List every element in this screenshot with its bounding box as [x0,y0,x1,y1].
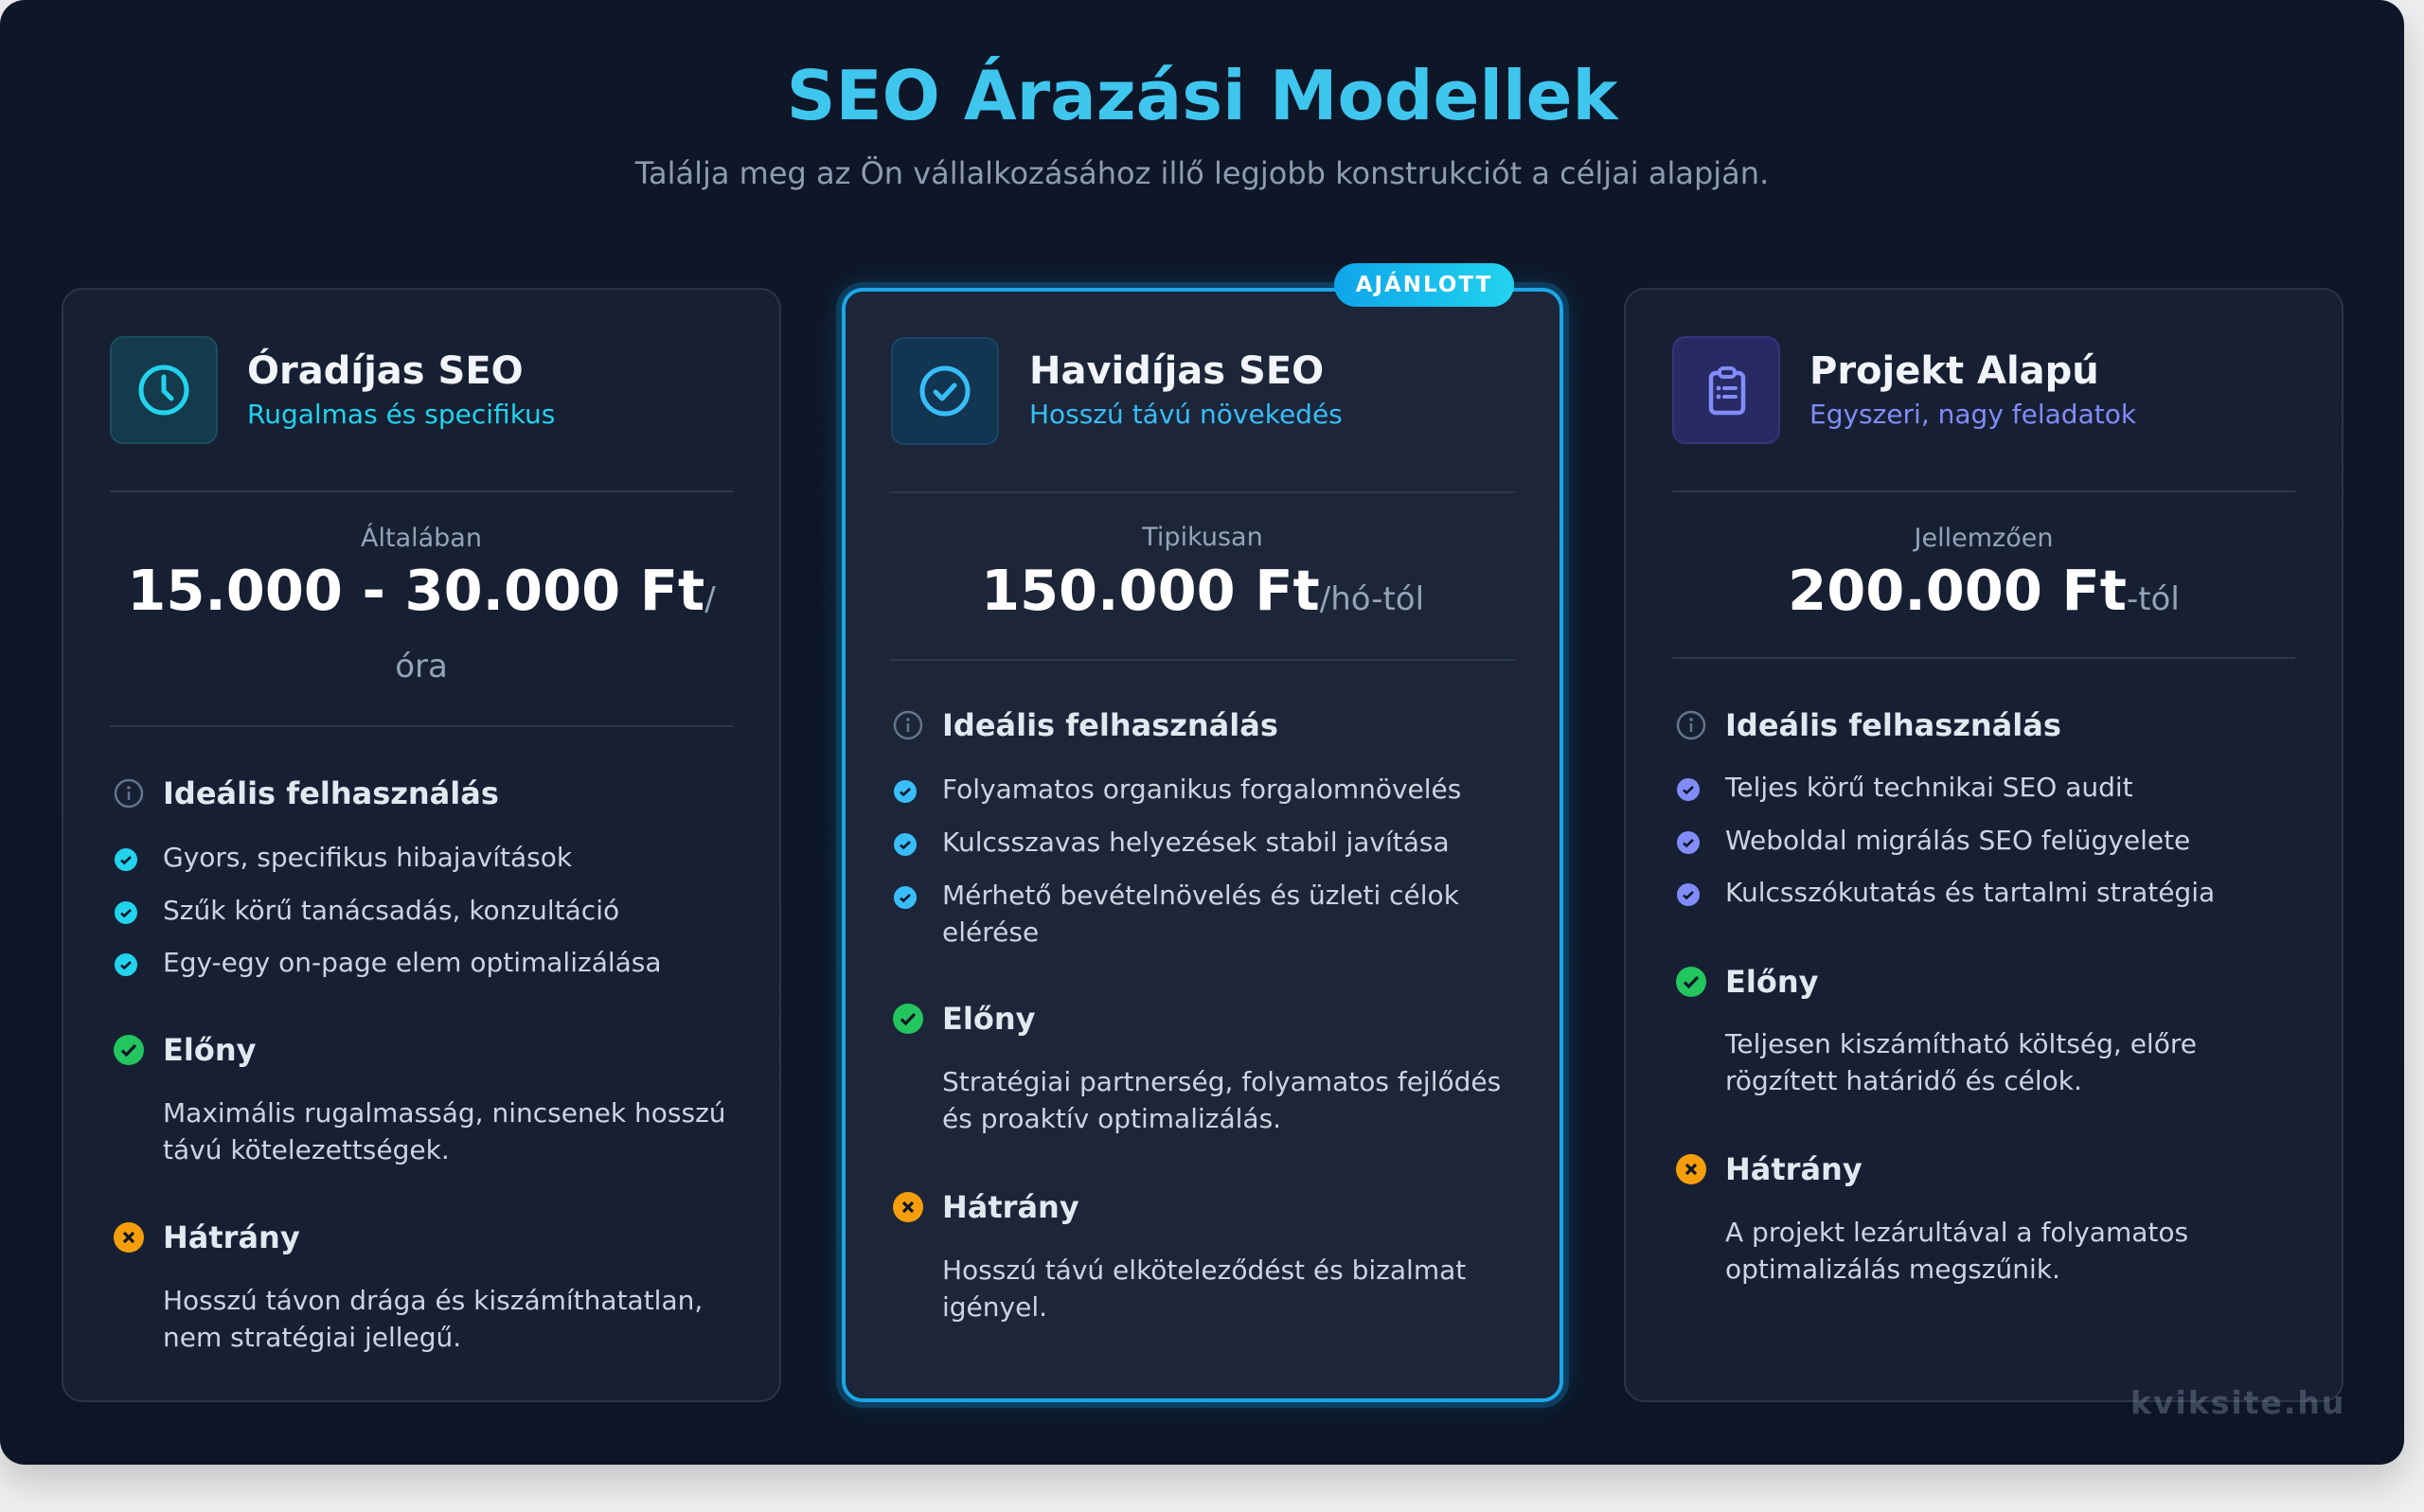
section: advantage: Előny [163,1032,256,1068]
section: disadvantage: Hosszú távon drága és kiszámíthatatlan, nem stratégiai jellegű. [163,1285,703,1353]
badge [1334,263,1514,307]
section: disadvantage [893,1189,1466,1323]
badge: AJÁNLOTT [1356,273,1492,297]
section: disadvantage: A projekt lezárultával a folyamatos optimalizálás megszűnik. [1725,1217,2188,1285]
section: ideal use [894,707,1461,948]
subtitle: Találja meg az Ön vállalkozásához illő legjobb konstrukciót a céljai alapján. [635,155,1769,191]
section: ideal use: Ideális felhasználás [942,707,1278,743]
icon: check circle [891,337,999,445]
section: disadvantage: Hátrány [163,1219,300,1255]
watermark: kviksite.hu [2130,1384,2345,1421]
price: 15.000 - 30.000 Ft/ [127,558,716,623]
card subtitle: Hosszú távú növekedés [1029,399,1343,430]
price label: Általában [361,524,482,553]
card subtitle: Egyszeri, nagy feladatok [1809,399,2136,430]
title: SEO Árazási Modellek [787,56,1617,135]
section: ideal use: Szűk körű tanácsadás, konzultáció [163,895,619,926]
section: disadvantage: Hátrány [942,1189,1079,1225]
section: ideal use: Teljes körű technikai SEO audit [1725,772,2133,803]
price label: Jellemzően [1915,524,2053,553]
section: ideal use: Kulcsszavas helyezések stabil javítása [942,827,1450,858]
section: advantage: Előny [942,1001,1035,1037]
section: ideal use [1676,707,2215,908]
card title: Projekt Alapú [1809,349,2099,393]
section: advantage: Előny [1725,964,1818,1000]
price: 200.000 Ft-tól [1788,558,2180,623]
section: advantage [114,1032,726,1165]
section: ideal use: elérése [942,916,1039,948]
section: advantage [1676,964,2197,1096]
section: ideal use: Weboldal migrálás SEO felügyelete [1725,825,2190,856]
section: advantage [893,1001,1501,1134]
section: ideal use: Egy-egy on-page elem optimalizálása [163,947,662,978]
section: advantage: Maximális rugalmasság, nincsenek hosszú távú kötelezettségek. [163,1097,726,1165]
price: 150.000 Ft/hó-tól [981,558,1424,623]
section: advantage: Teljesen kiszámítható költség, előre rögzített határidő és célok. [1725,1028,2197,1096]
section: ideal use: Ideális felhasználás [1725,707,2061,743]
section: ideal use: Gyors, specifikus hibajavítások [163,842,572,873]
panel: monthly (recommended) [842,288,1563,1402]
card subtitle: Rugalmas és specifikus [247,399,555,430]
section: ideal use [114,775,662,978]
icon: clock [110,336,218,444]
price unit: óra [395,648,448,685]
card title: Havidíjas SEO [1029,349,1324,393]
section: disadvantage: Hátrány [1725,1151,1863,1187]
section: ideal use: Ideális felhasználás [163,775,499,811]
section: disadvantage [114,1219,703,1353]
section: advantage: Stratégiai partnerség, folyamatos fejlődés és proaktív optimalizálás. [942,1066,1501,1134]
panel: hourly [62,288,781,1402]
section: ideal use: Folyamatos organikus forgalomnövelés [942,774,1461,805]
panel: project [1624,288,2344,1402]
section: disadvantage: Hosszú távú elköteleződést és bizalmat igényel. [942,1254,1466,1323]
card title: Óradíjas SEO [247,349,524,393]
section: ideal use: Kulcsszókutatás és tartalmi stratégia [1725,877,2215,908]
section: disadvantage [1676,1151,2188,1285]
icon: clipboard [1672,336,1780,444]
icon: info [114,778,144,809]
price label: Tipikusan [1142,523,1263,552]
section: ideal use: Mérhető bevételnövelés és üzleti célok [942,880,1459,911]
